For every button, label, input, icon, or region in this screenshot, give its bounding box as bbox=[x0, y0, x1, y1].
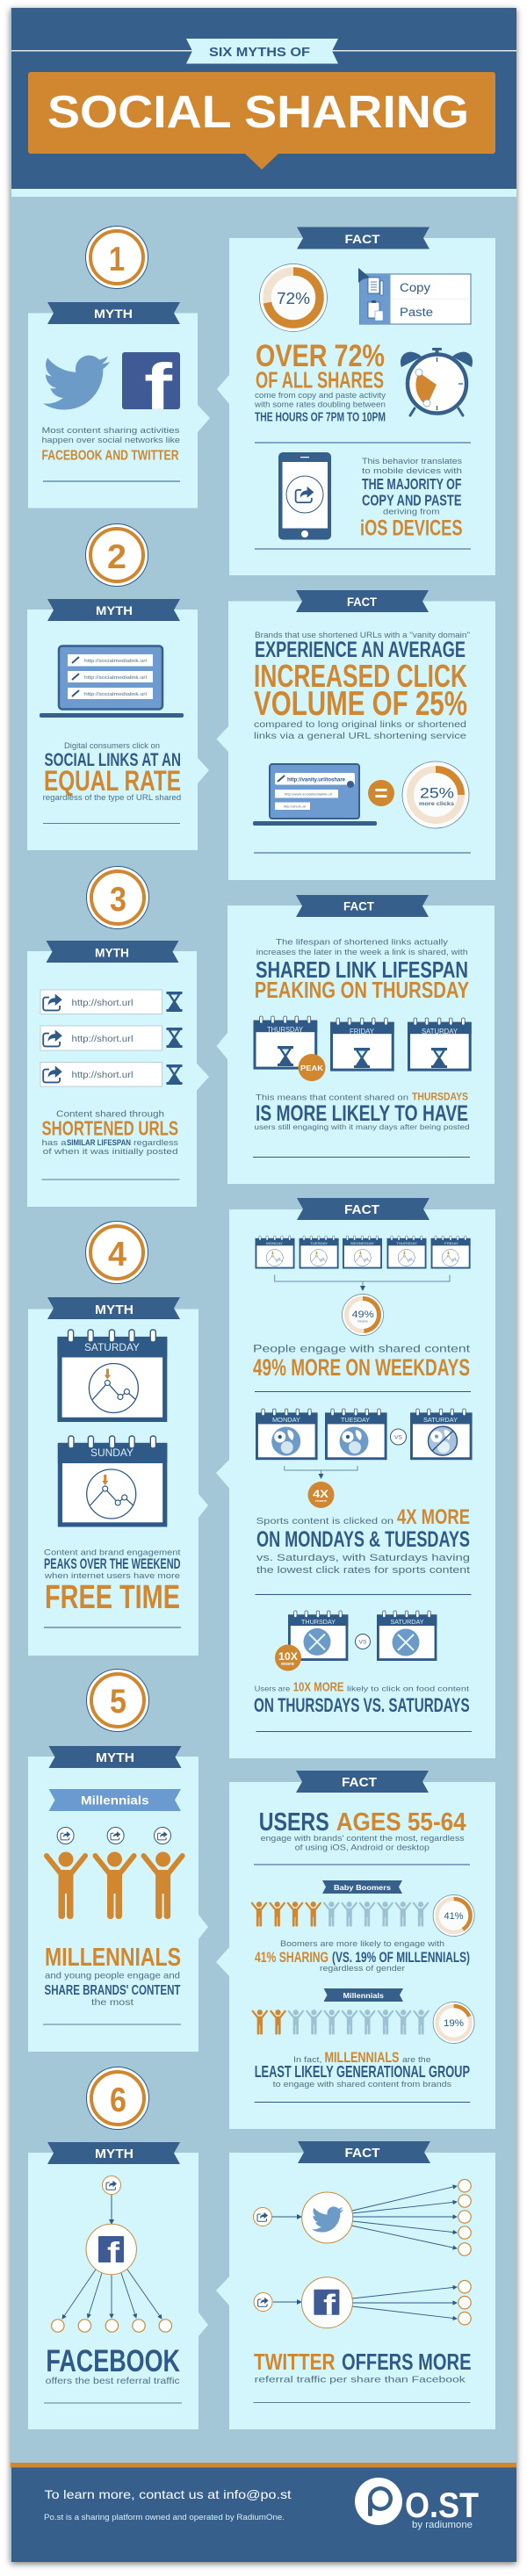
short url rows: http://short.url bbox=[72, 999, 134, 1008]
fact text bbox=[255, 1091, 470, 1131]
sports calendars: SATURDAY bbox=[423, 1416, 458, 1424]
calendar saturday bbox=[408, 1018, 472, 1070]
fact panel 6 bbox=[216, 2141, 495, 2429]
myth ribbon bbox=[47, 302, 180, 324]
millennials text: MILLENNIALS bbox=[325, 2049, 399, 2066]
footer text bbox=[44, 2487, 292, 2522]
myth ribbon bbox=[47, 599, 180, 621]
fact ribbon bbox=[297, 1198, 430, 1220]
ios text: iOS DEVICES bbox=[360, 516, 462, 541]
number badge 5: 5 bbox=[110, 1683, 126, 1721]
fact ribbon bbox=[298, 2141, 430, 2163]
millennials ribbon bbox=[49, 1789, 181, 1811]
myth text: offers the best referral traffic bbox=[46, 2376, 180, 2386]
myth text bbox=[43, 741, 181, 802]
fact panel 2 bbox=[216, 590, 495, 880]
icon: laptop vanity url: http://www.socialmedialink.url bbox=[285, 792, 332, 796]
myth panel 4 bbox=[28, 1297, 208, 1656]
headline over 72%: OVER 72% bbox=[256, 339, 385, 373]
fact panel 5 bbox=[216, 1771, 495, 2129]
myth text: Content shared through bbox=[56, 1110, 164, 1119]
myth ribbon: MYTH bbox=[96, 1751, 134, 1765]
calendar friday bbox=[330, 1018, 394, 1070]
myth text: SHARE BRANDS' CONTENT bbox=[44, 1983, 181, 1998]
fact text: THURSDAYS bbox=[412, 1091, 468, 1103]
number badge 3: 3 bbox=[110, 881, 126, 919]
myth ribbon bbox=[47, 2142, 180, 2164]
headline over 72%: come from copy and paste activity bbox=[255, 391, 386, 400]
myth text: SOCIAL LINKS AT AN bbox=[44, 750, 181, 770]
myth panel 1 bbox=[28, 302, 210, 508]
icon: equals bbox=[368, 780, 394, 806]
donut 72% bbox=[260, 263, 327, 332]
ios text: to mobile devices with bbox=[362, 466, 462, 475]
myth text: the most bbox=[91, 1997, 134, 2008]
calendar saturday bbox=[57, 1330, 167, 1419]
sports text: 4X MORE bbox=[397, 1505, 470, 1529]
sports text: the lowest click rates for sports content bbox=[256, 1565, 470, 1576]
people with share icons bbox=[47, 1827, 183, 1919]
footer text: To learn more, contact us at info@po.st bbox=[44, 2487, 292, 2501]
sports calendars: MONDAY bbox=[272, 1416, 300, 1424]
facebook referral diagram bbox=[52, 2176, 171, 2332]
myth ribbon bbox=[49, 1746, 181, 1768]
myth text: FACEBOOK AND TWITTER bbox=[42, 448, 179, 464]
myth text: SIMILAR LIFESPAN bbox=[67, 1138, 131, 1148]
weekday text bbox=[253, 1342, 471, 1381]
number badge 1: 1 bbox=[109, 241, 125, 278]
logo: O.ST bbox=[405, 2486, 479, 2525]
millennials text bbox=[255, 2049, 470, 2089]
donut 25%: more clicks bbox=[419, 801, 454, 807]
fact ribbon bbox=[296, 590, 429, 612]
headline over 72%: with some rates doubling between bbox=[254, 400, 386, 409]
fact ribbon: FACT bbox=[344, 232, 380, 246]
headline lifespan: increases the later in the week a link is shared, with bbox=[256, 948, 468, 957]
users headline bbox=[259, 1808, 466, 1853]
myth text: Digital consumers click on bbox=[64, 741, 160, 750]
millennials text: In fact, bbox=[293, 2055, 321, 2065]
number badge 6 bbox=[86, 2067, 149, 2129]
baby boomers ribbon bbox=[322, 1880, 402, 1894]
icon: alarm clock bbox=[401, 348, 473, 415]
myth ribbon: MYTH bbox=[95, 1302, 134, 1317]
myth text: EQUAL RATE bbox=[44, 765, 181, 797]
headline lifespan bbox=[255, 938, 469, 1003]
donut 49% bbox=[343, 1295, 383, 1335]
icon: facebook bbox=[122, 350, 180, 423]
calendar saturday: SATURDAY bbox=[422, 1028, 458, 1035]
fact text: referral traffic per share than Facebook bbox=[255, 2375, 466, 2385]
bracket arrow bbox=[285, 1466, 357, 1478]
copy paste menu bbox=[358, 268, 471, 324]
4x badge: 4X bbox=[313, 1488, 328, 1500]
fact panel 4 bbox=[216, 1198, 495, 1758]
icon: laptop with links: http://socialmedialink.url bbox=[84, 692, 147, 697]
subtitle ribbon: SIX MYTHS OF bbox=[209, 46, 310, 60]
title banner bbox=[28, 72, 495, 170]
fact panel 3 bbox=[216, 895, 495, 1184]
myth panel 2 bbox=[27, 599, 209, 850]
food calendars: SATURDAY bbox=[390, 1618, 423, 1626]
baby boomers ribbon: Baby Boomers bbox=[334, 1883, 391, 1892]
myth ribbon: MYTH bbox=[96, 603, 133, 617]
myth text: when internet users have more bbox=[44, 1571, 180, 1581]
myth text: of when it was initially posted bbox=[43, 1147, 178, 1157]
10x badge bbox=[275, 1644, 301, 1670]
icon: laptop vanity url: http://short.url bbox=[284, 805, 306, 808]
icon: laptop vanity url bbox=[253, 764, 377, 826]
ios text: This behavior translates bbox=[362, 457, 463, 465]
boomers text: regardless of gender bbox=[320, 1964, 405, 1973]
fact text: users still engaging with it many days after being posted bbox=[255, 1122, 470, 1131]
calendar saturday: SATURDAY bbox=[84, 1343, 140, 1353]
twitter referral diagram bbox=[253, 2180, 471, 2255]
myth text: FREE TIME bbox=[45, 1579, 180, 1616]
headline over 72%: OF ALL SHARES bbox=[256, 369, 384, 393]
copy paste menu: Paste bbox=[400, 306, 433, 319]
fact ribbon: FACT bbox=[342, 1775, 377, 1790]
copy paste menu: Copy bbox=[400, 281, 430, 294]
weekday calendars bbox=[255, 1236, 471, 1268]
myth ribbon: MYTH bbox=[94, 307, 133, 321]
food text: likely to click on food content bbox=[347, 1685, 470, 1693]
donut 19%: 19% bbox=[444, 2018, 464, 2029]
donut 19% bbox=[433, 2002, 474, 2043]
donut 72%: 72% bbox=[277, 290, 310, 307]
headline 25%: Brands that use shortened URLs with a "vanity domain" bbox=[255, 631, 470, 639]
short url rows: http://short.url bbox=[72, 1035, 134, 1044]
myth panel 5 bbox=[28, 1746, 208, 2052]
ios text: deriving from bbox=[383, 508, 439, 516]
number badge 5 bbox=[86, 1669, 149, 1732]
title banner: SOCIAL SHARING bbox=[47, 87, 469, 138]
myth text: PEAKS OVER THE WEEKEND bbox=[44, 1556, 181, 1572]
number badge 2: 2 bbox=[107, 538, 126, 576]
donut 25%: 25% bbox=[420, 785, 454, 801]
peak badge: PEAK bbox=[300, 1064, 324, 1072]
footer bbox=[11, 2463, 516, 2562]
facebook referral diagram bbox=[254, 2277, 471, 2328]
myth panel 6 bbox=[28, 2142, 208, 2429]
calendar sunday: SUNDAY bbox=[90, 1448, 134, 1459]
boomers text bbox=[255, 1939, 470, 1973]
icon: laptop with links: http://socialmedialink.url bbox=[84, 675, 147, 681]
sports calendars: TUESDAY bbox=[341, 1416, 370, 1424]
fact text bbox=[254, 2349, 471, 2385]
users headline: AGES 55-64 bbox=[336, 1808, 466, 1836]
myth panel 3 bbox=[27, 941, 209, 1207]
calendar thursday: THURSDAY bbox=[267, 1026, 304, 1034]
fact ribbon: FACT bbox=[343, 899, 374, 913]
calendar thursday bbox=[253, 1016, 317, 1068]
donut 49%: more bbox=[357, 1319, 369, 1323]
ios text: THE MAJORITY OF bbox=[362, 475, 462, 493]
peak badge bbox=[299, 1054, 325, 1081]
myth text: regardless of the type of URL shared bbox=[43, 793, 181, 802]
headline lifespan: PEAKING ON THURSDAY bbox=[255, 977, 469, 1003]
fact text: TWITTER bbox=[254, 2349, 336, 2375]
people row 19% bbox=[253, 2010, 429, 2034]
myth text: Content and brand engagement bbox=[44, 1548, 181, 1558]
myth text: MILLENNIALS bbox=[45, 1944, 181, 1972]
facebook referral diagram: f bbox=[107, 2236, 120, 2269]
icon: phone bbox=[278, 452, 331, 539]
headline over 72%: THE HOURS OF 7PM TO 10PM bbox=[255, 409, 386, 425]
donut 41%: 41% bbox=[444, 1911, 464, 1922]
donut 41% bbox=[433, 1895, 474, 1936]
calendar sunday bbox=[58, 1436, 167, 1525]
vs badge: VS bbox=[358, 1639, 367, 1646]
short url rows: http://short.url bbox=[72, 1071, 134, 1080]
millennials ribbon: Millennials bbox=[343, 1991, 384, 2000]
users headline: USERS bbox=[259, 1808, 329, 1836]
calendar friday: FRIDAY bbox=[350, 1028, 375, 1035]
myth ribbon bbox=[46, 941, 179, 963]
bracket arrow bbox=[275, 1275, 450, 1290]
myth text bbox=[44, 1548, 181, 1616]
food calendars: THURSDAY bbox=[301, 1618, 336, 1626]
myth text: and young people engage and bbox=[45, 1971, 180, 1981]
headline 25%: links via a general URL shortening service bbox=[254, 731, 466, 741]
headline lifespan: The lifespan of shortened links actually bbox=[276, 938, 448, 947]
myth text: has a bbox=[42, 1138, 67, 1148]
fact panel 1 bbox=[217, 227, 495, 575]
logo bbox=[355, 2478, 479, 2530]
4x badge: more bbox=[315, 1498, 328, 1503]
vs badge bbox=[355, 1634, 371, 1649]
myth text: Most content sharing activities bbox=[42, 426, 180, 436]
myth text: FACEBOOK bbox=[46, 2344, 180, 2378]
headline over 72% bbox=[254, 339, 386, 425]
donut 49%: 49% bbox=[352, 1310, 374, 1320]
myth text: SHORTENED URLS bbox=[42, 1117, 178, 1140]
sports text: Sports content is clicked on bbox=[256, 1516, 393, 1526]
users headline: of using iOS, Android or desktop bbox=[295, 1844, 430, 1853]
people row 41% bbox=[252, 1901, 428, 1926]
millennials text: are the bbox=[402, 2055, 430, 2065]
fact ribbon: FACT bbox=[344, 2147, 380, 2161]
weekday calendars: TUESDAY bbox=[310, 1241, 328, 1245]
weekday calendars: FRIDAY bbox=[444, 1241, 458, 1245]
10x badge: more bbox=[281, 1662, 294, 1667]
food text: 10X MORE bbox=[293, 1680, 344, 1695]
icon: twitter bird bbox=[43, 356, 110, 409]
millennials text: to engage with shared content from brands bbox=[273, 2080, 451, 2089]
number badge 4 bbox=[86, 1221, 148, 1284]
logo: by radiumone bbox=[412, 2520, 473, 2530]
number badge 6: 6 bbox=[110, 2082, 126, 2119]
myth text bbox=[42, 1110, 178, 1157]
myth ribbon bbox=[47, 1297, 180, 1319]
icon: facebook: f bbox=[144, 350, 172, 423]
sports calendars bbox=[256, 1409, 473, 1459]
fact text: OFFERS MORE bbox=[342, 2349, 471, 2375]
4x badge bbox=[307, 1482, 334, 1508]
weekday calendars: THURSDAY bbox=[396, 1241, 417, 1245]
boomers text: 41% SHARING bbox=[255, 1949, 328, 1966]
donut 25% bbox=[402, 761, 469, 828]
boomers text: (VS. 19% OF MILLENNIALS) bbox=[332, 1949, 470, 1966]
myth text bbox=[42, 426, 180, 464]
ios text bbox=[360, 457, 463, 541]
number badge 1 bbox=[86, 227, 148, 288]
myth text: happen over social networks like bbox=[42, 436, 180, 445]
food text: Users are bbox=[255, 1685, 290, 1693]
short url rows bbox=[40, 990, 183, 1086]
food calendars bbox=[288, 1611, 437, 1660]
millennials ribbon: Millennials bbox=[81, 1793, 149, 1808]
sports text: vs. Saturdays, with Saturdays having bbox=[256, 1553, 470, 1563]
headline 25%: compared to long original links or shortened bbox=[254, 719, 466, 730]
header bbox=[11, 8, 516, 197]
headline 25% bbox=[254, 631, 470, 741]
subtitle ribbon bbox=[186, 39, 338, 63]
headline lifespan: SHARED LINK LIFESPAN bbox=[256, 956, 468, 983]
footer text: Po.st is a sharing platform owned and operated by RadiumOne. bbox=[44, 2513, 285, 2522]
fact ribbon bbox=[296, 1771, 429, 1793]
number badge 2 bbox=[86, 523, 148, 587]
myth text bbox=[44, 1944, 181, 2008]
ios text: COPY AND PASTE bbox=[362, 492, 462, 509]
users headline: engage with brands' content the most, regardless bbox=[261, 1834, 465, 1844]
myth text: regardless bbox=[134, 1138, 178, 1148]
fact ribbon bbox=[296, 895, 429, 917]
weekday text: People engage with shared content bbox=[253, 1342, 471, 1354]
number badge 3 bbox=[86, 866, 149, 929]
number badge 4: 4 bbox=[108, 1236, 126, 1274]
vs badge: VS bbox=[394, 1435, 403, 1440]
sports text bbox=[256, 1505, 470, 1576]
myth ribbon: MYTH bbox=[95, 945, 129, 959]
myth ribbon: MYTH bbox=[95, 2147, 134, 2161]
10x badge: 10X bbox=[278, 1650, 298, 1663]
fact text: IS MORE LIKELY TO HAVE bbox=[256, 1101, 468, 1126]
icon: laptop with links bbox=[40, 646, 184, 718]
icon: laptop vanity url: http://vanity.url/toshare bbox=[287, 778, 346, 783]
vs badge bbox=[390, 1429, 406, 1445]
facebook referral diagram: f bbox=[323, 2289, 336, 2321]
boomers text: Boomers are more likely to engage with bbox=[280, 1939, 444, 1949]
icon: laptop with links: http://socialmedialink.url bbox=[84, 659, 147, 664]
food text bbox=[254, 1680, 470, 1716]
fact ribbon bbox=[297, 227, 430, 249]
fact ribbon: FACT bbox=[344, 1202, 379, 1217]
weekday calendars: WEDNESDAY bbox=[350, 1241, 374, 1245]
fact ribbon: FACT bbox=[347, 595, 377, 609]
weekday calendars: MONDAY bbox=[266, 1241, 283, 1245]
fact text: This means that content shared on bbox=[256, 1093, 408, 1103]
millennials ribbon bbox=[323, 1988, 403, 2002]
myth text bbox=[46, 2344, 180, 2386]
